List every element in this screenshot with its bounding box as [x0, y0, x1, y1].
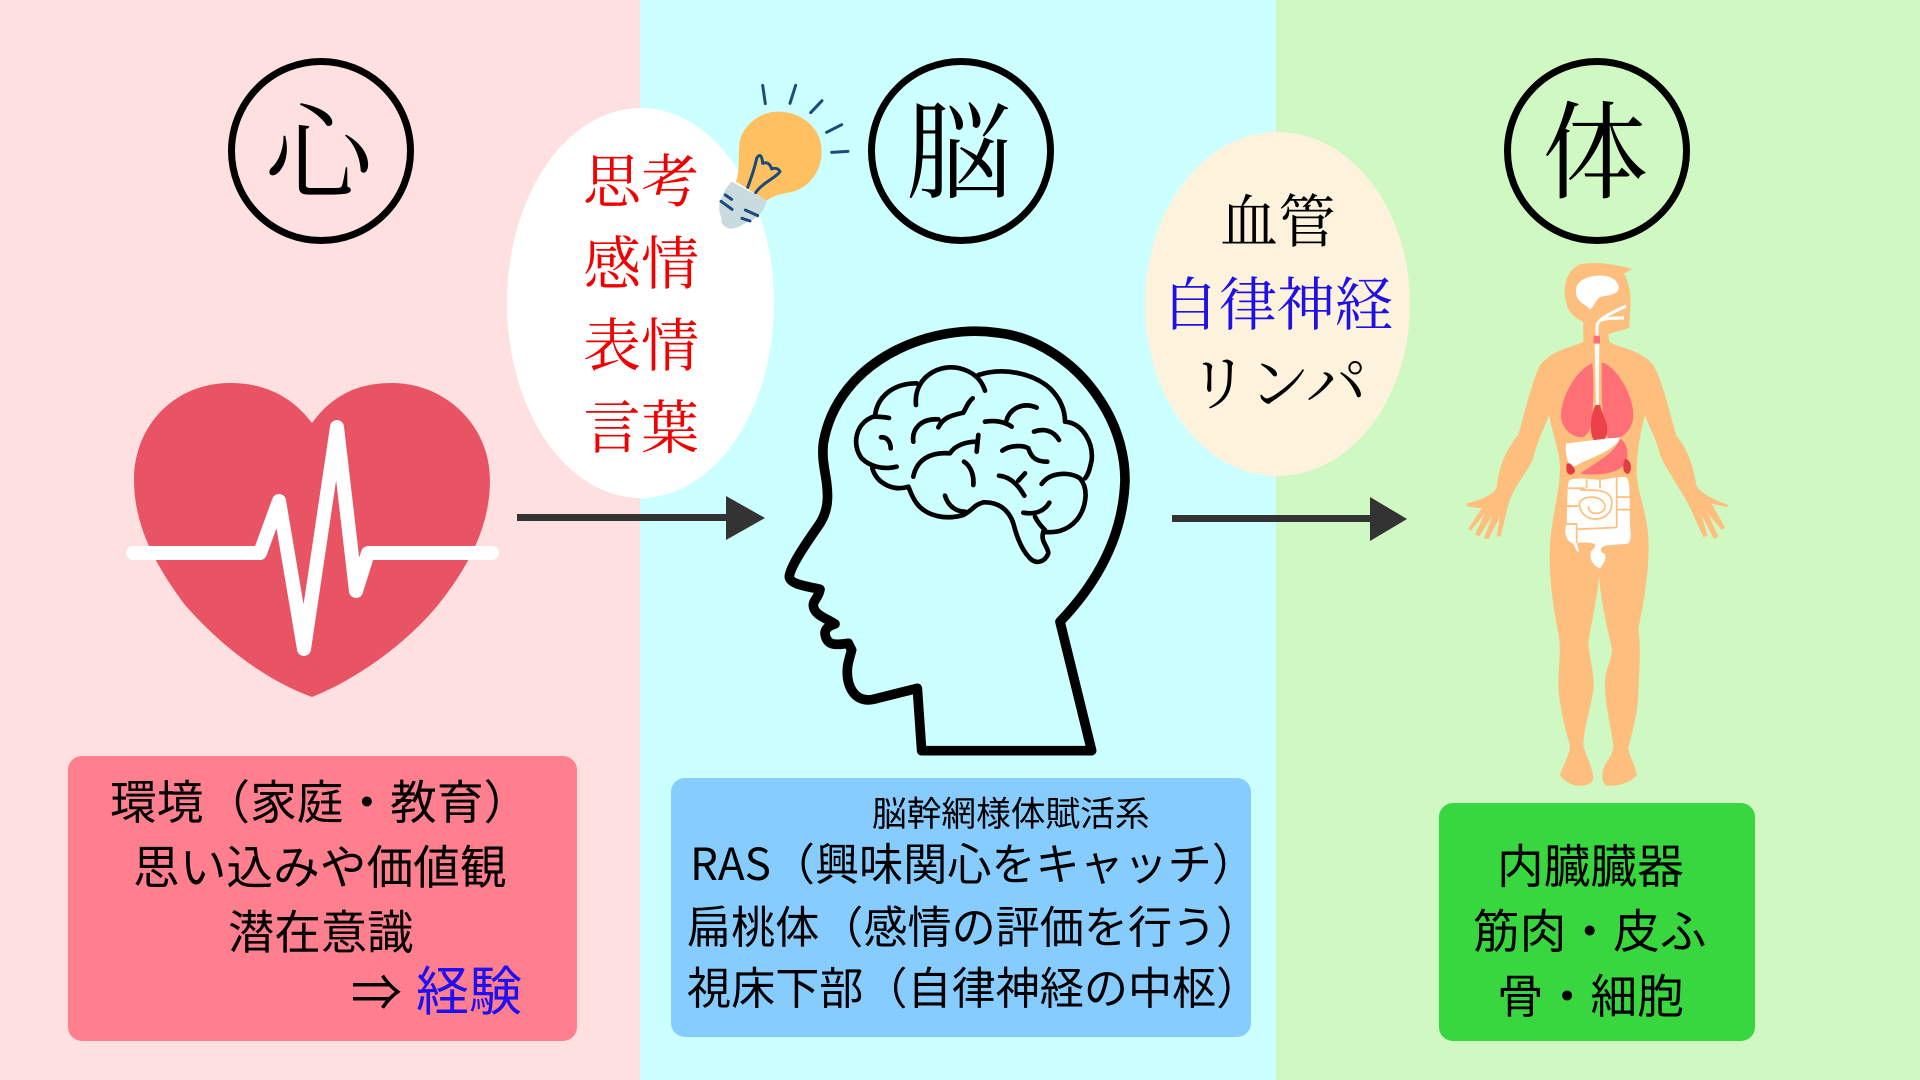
panel: body background: [1276, 0, 1920, 1080]
heading: brain circle: 脳: [906, 96, 1012, 213]
text block: thoughts: [583, 150, 699, 461]
panel: brain text box: [671, 778, 1251, 1037]
text block: thoughts: 感情: [583, 232, 699, 297]
text: RAS line: RAS（興味関心をキャッチ）: [690, 829, 1256, 893]
callout: white oval: [507, 108, 774, 498]
text: muscle and skin line: 筋肉・皮ふ: [1473, 906, 1706, 958]
text: beliefs line: 思い込みや価値観: [133, 842, 507, 894]
heading: heart circle: 心: [266, 96, 372, 213]
text block: pathways: 血管: [1220, 190, 1336, 255]
text: bones and cells line: 骨・細胞: [1497, 971, 1684, 1023]
heading: body circle: [1504, 58, 1690, 244]
text: organs line: 内臓臓器: [1497, 841, 1684, 893]
heading: body circle: 体: [1542, 96, 1648, 213]
text block: thoughts: 思考: [583, 150, 699, 215]
text block: thoughts: 言葉: [583, 396, 699, 461]
text: environment line: 環境（家庭・教育）: [110, 777, 530, 829]
text: amygdala line: 扁桃体（感情の評価を行う）: [687, 892, 1260, 956]
text block: pathways: 自律神経: [1161, 273, 1393, 338]
text: hypothalamus line: 視床下部（自律神経の中枢）: [687, 953, 1260, 1017]
panel: body text box: [1439, 803, 1755, 1041]
text: experience: 経験: [416, 963, 522, 1022]
text block: pathways: リンパ: [1188, 352, 1367, 419]
text block: pathways: [1161, 190, 1393, 419]
callout: cream oval: [1145, 132, 1410, 476]
text: subconscious line: 潜在意識: [228, 907, 414, 959]
heading: heart circle: [228, 58, 414, 244]
text block: thoughts: 表情: [583, 314, 699, 379]
heading: brain circle: [868, 58, 1054, 244]
text: arrow symbol: ⇒: [351, 965, 402, 1022]
panel: heart text box: [68, 756, 577, 1041]
text: reticular formation: 脳幹網様体賦活系: [872, 786, 1150, 836]
panel: heart background: [0, 0, 640, 1080]
panel: brain background: [640, 0, 1276, 1080]
